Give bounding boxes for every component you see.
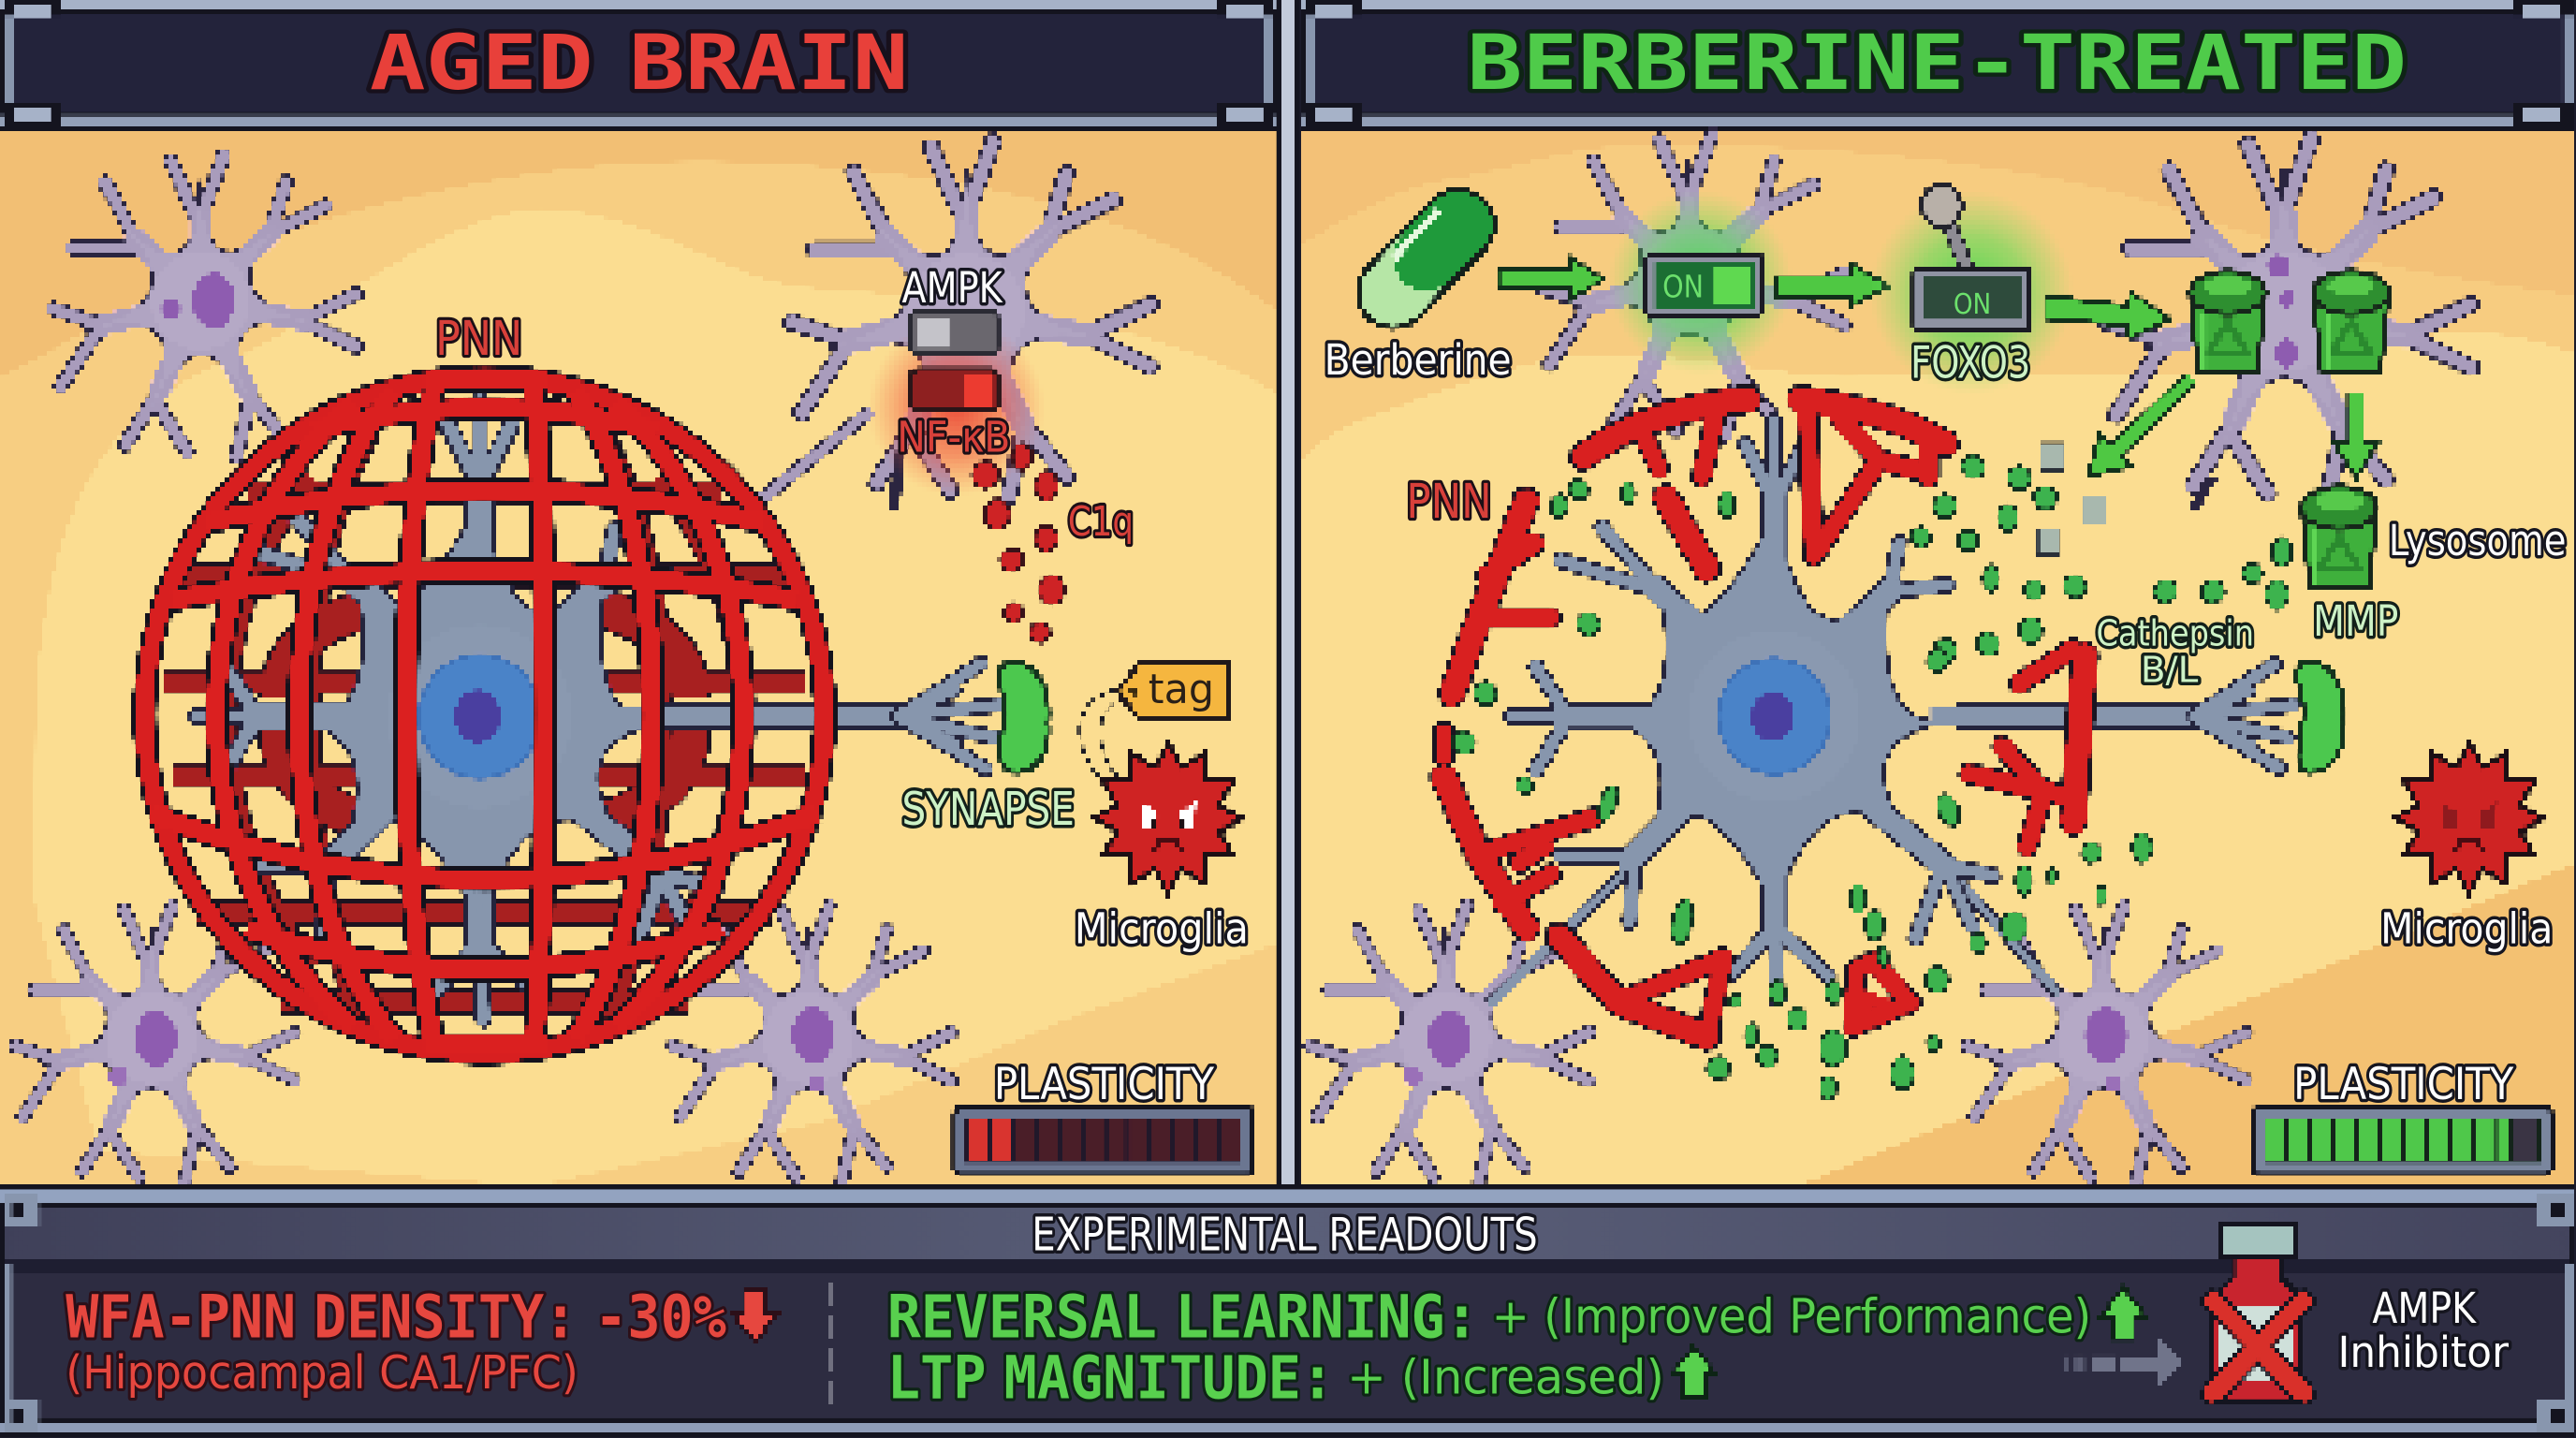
label: cathepsin B/L — [2097, 613, 2254, 691]
icon: lysosome bin 2 — [2313, 271, 2389, 373]
label: microglia: Microglia — [1075, 903, 1249, 953]
arrow: berberine to AMPK — [1499, 257, 1603, 301]
switch: AMPK on — [1647, 255, 1763, 315]
readout: WFA-PNN density: WFA-PNN DENSITY: -30% — [66, 1283, 726, 1352]
grey matrix debris — [2037, 444, 2106, 553]
dashed divider — [828, 1282, 831, 1406]
arrow: density down — [733, 1288, 777, 1343]
panel: experimental readouts — [0, 1184, 2576, 1438]
arrow: faded inhibitor arrow — [2063, 1339, 2184, 1386]
switch: AMPK off — [912, 312, 997, 353]
label: cathepsin B/L: B/L — [2141, 649, 2199, 691]
title: berberine-treated: BERBERINE-TREATED — [1467, 20, 2407, 108]
microglia: angry — [1092, 742, 1244, 894]
green degradation particles — [1453, 455, 2291, 1099]
label: C1q: C1q — [1068, 498, 1134, 546]
background: sand blobs — [1299, 131, 2576, 1186]
label: PNN: PNN — [435, 312, 522, 367]
astrocyte: upper left — [52, 156, 357, 457]
astrocyte: lower left — [15, 905, 295, 1182]
microglia: quieted — [2393, 742, 2545, 894]
title: aged brain: AGED BRAIN — [370, 20, 909, 108]
readout note: increased: + (Increased) — [1347, 1350, 1664, 1405]
panel divider — [1277, 0, 1299, 1186]
astrocyte: lysosome cell — [2106, 139, 2471, 509]
label: cathepsin B/L: Cathepsin — [2097, 613, 2254, 655]
astrocyte: lower right — [672, 905, 952, 1182]
label: AMPK inhibitor: Inhibitor — [2338, 1328, 2509, 1377]
tag label — [1117, 662, 1227, 720]
label: FOXO3: FOXO3 — [1910, 338, 2030, 389]
label: tag: tag — [1149, 666, 1214, 713]
arrow: reversal learning up — [2101, 1286, 2145, 1339]
readout: LTP magnitude: LTP MAGNITUDE: — [887, 1343, 1334, 1413]
background: sand blobs — [0, 131, 1278, 1186]
arrow: LTP up — [1671, 1345, 1717, 1399]
icon: lysosome bin 3 — [2302, 487, 2378, 588]
label: switch on: ON — [1662, 269, 1704, 305]
header frame: aged brain — [0, 0, 1278, 133]
readout note: region: (Hippocampal CA1/PFC) — [66, 1345, 578, 1400]
neuron: caged — [196, 400, 999, 1019]
readouts frame — [0, 1184, 2576, 1438]
broken perineuronal net fragments — [1444, 399, 2085, 1036]
panel: aged brain — [0, 0, 1278, 1186]
arrow: lysosome down — [2334, 392, 2378, 478]
header frame: berberine-treated — [1299, 0, 2576, 133]
label: AMPK inhibitor: AMPK — [2372, 1284, 2477, 1333]
tag string — [1079, 687, 1134, 797]
arrow: lysosome to debris — [2088, 378, 2191, 477]
label: AMPK: AMPK — [902, 263, 1003, 313]
label: NF-kB: NF-κB — [897, 413, 1010, 462]
astrocyte: lower left — [1310, 905, 1589, 1182]
astrocyte: AMPK signalling cell — [759, 141, 1150, 509]
icon: lysosome bin 1 — [2190, 271, 2265, 373]
icon: berberine capsule — [1393, 211, 1459, 292]
readout: reversal learning: REVERSAL LEARNING: — [887, 1283, 1479, 1352]
readout note: improved performance: + (Improved Performance) — [1492, 1289, 2091, 1344]
synapse bean — [2297, 662, 2345, 772]
label: synapse: SYNAPSE — [902, 782, 1075, 836]
neuron: freed — [1488, 420, 2293, 1005]
label: plasticity: PLASTICITY — [994, 1059, 1215, 1110]
C1q particles — [973, 444, 1064, 642]
glow: AMPK activation — [1608, 191, 1793, 374]
lever switch: FOXO3 — [1914, 184, 2030, 330]
label: MMP: MMP — [2313, 596, 2398, 646]
perineuronal net: back layer — [165, 431, 805, 1035]
synapse bean — [999, 663, 1048, 772]
perineuronal net: cage — [144, 376, 825, 1053]
label: plasticity: PLASTICITY — [2293, 1059, 2514, 1110]
plasticity bar: high — [2252, 1108, 2552, 1175]
arrow: AMPK to FOXO3 — [1778, 263, 1889, 307]
switch: NF-kB on — [912, 370, 997, 411]
plasticity bar: low — [955, 1108, 1253, 1175]
astrocyte: lower right — [1967, 905, 2247, 1182]
astrocyte: AMPK activated — [1541, 135, 1845, 435]
arrow: FOXO3 to lysosome — [2045, 292, 2170, 339]
icon: crossed-out inhibitor bottle — [2213, 1225, 2304, 1400]
label: berberine: Berberine — [1325, 335, 1512, 385]
label: lever on: ON — [1954, 288, 1991, 321]
label: PNN: PNN — [1406, 475, 1492, 530]
panel: berberine-treated — [1299, 0, 2576, 1186]
glow: NF-kB activation — [868, 318, 1045, 496]
label: AMPK inhibitor — [2338, 1284, 2509, 1377]
glow: FOXO3 activation — [1869, 191, 2073, 394]
heading: experimental readouts: EXPERIMENTAL READOUTS — [1032, 1208, 1538, 1262]
label: microglia: Microglia — [2380, 903, 2553, 953]
